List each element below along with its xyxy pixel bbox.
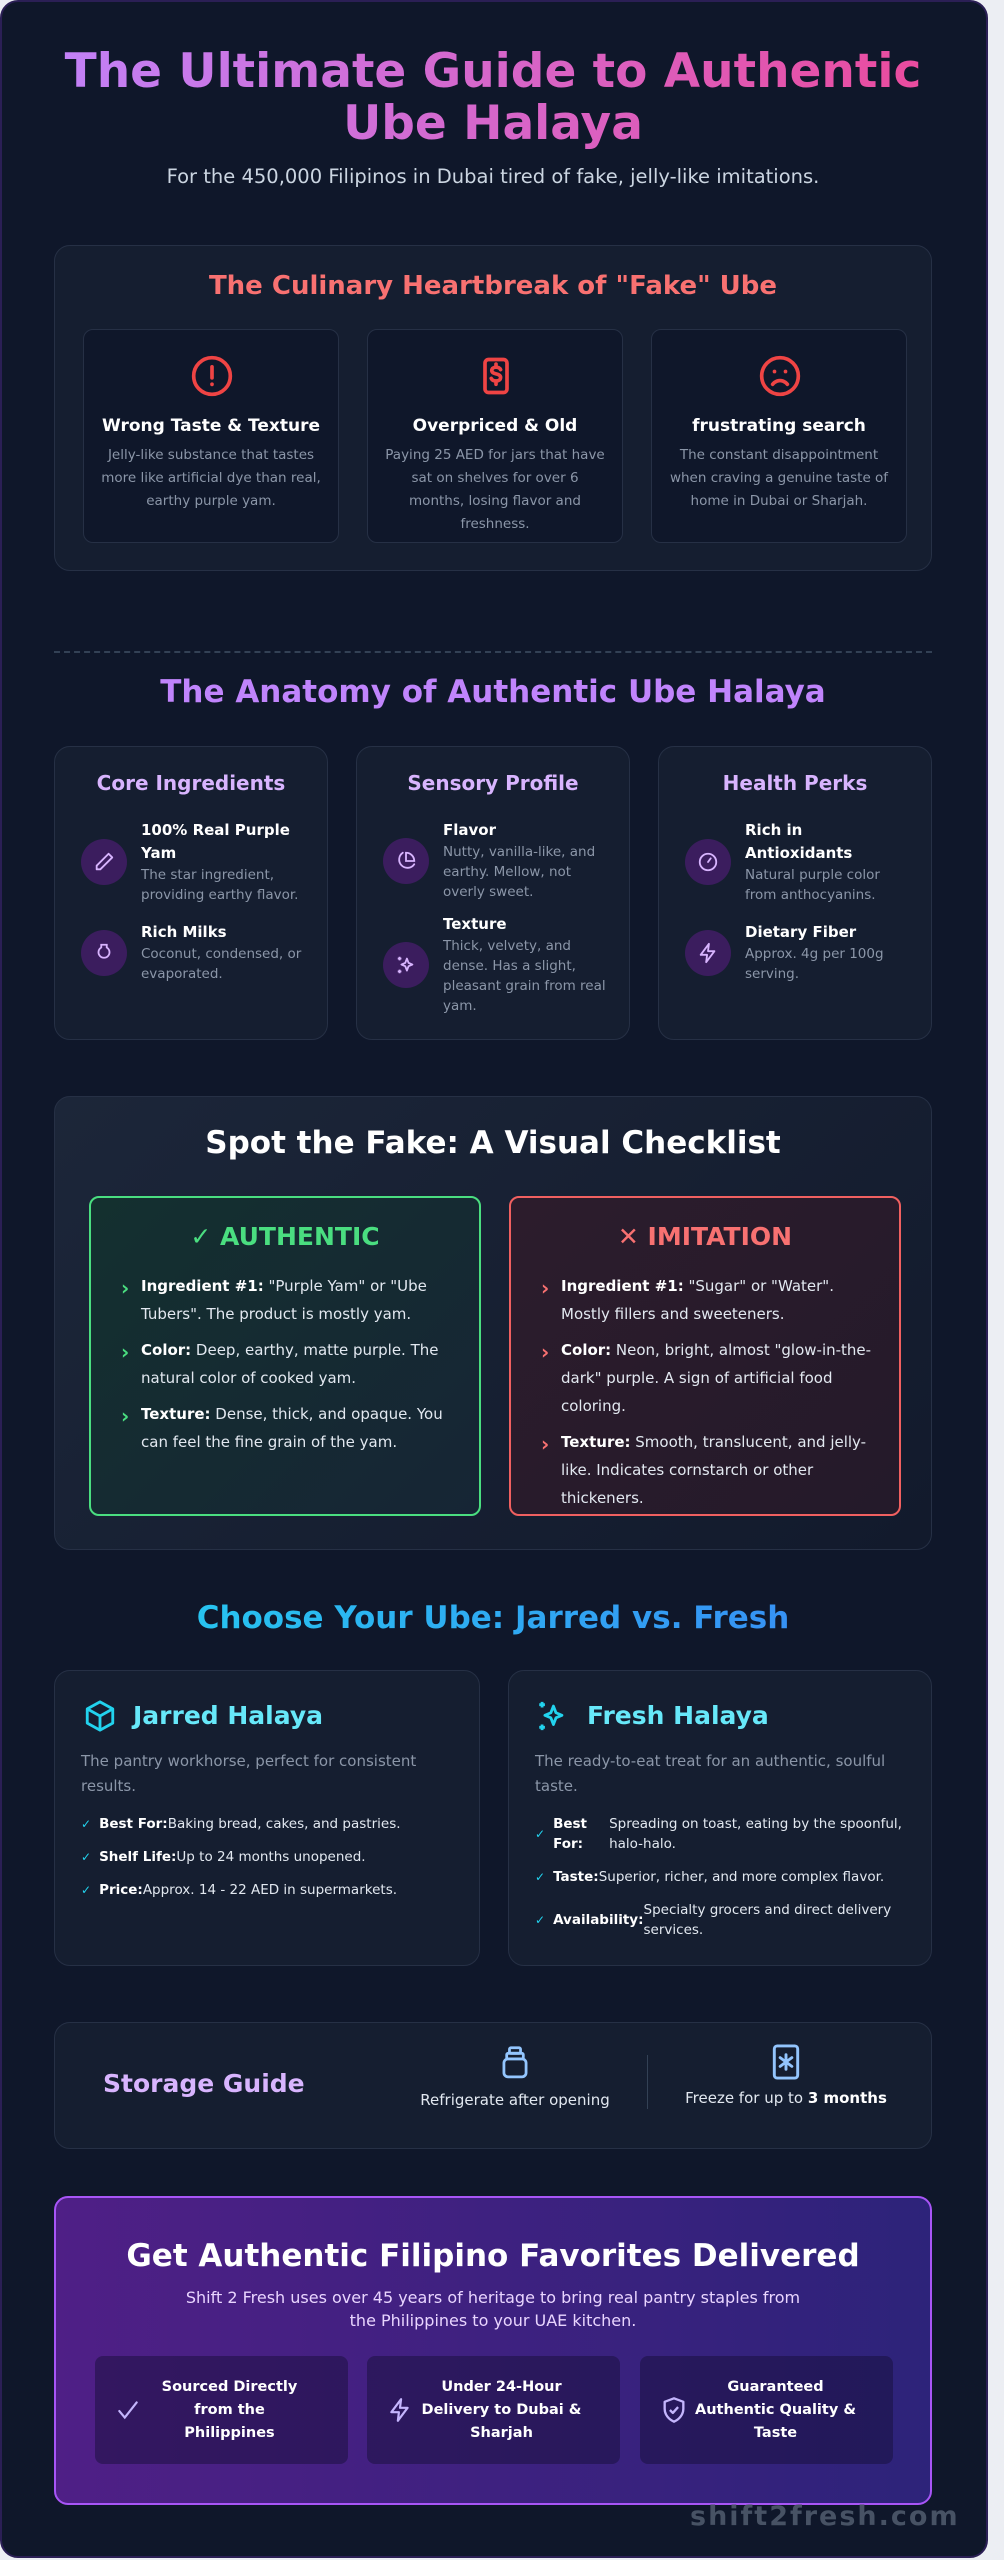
panel: jarred halaya [54, 1670, 480, 1966]
feature: quality [640, 2356, 893, 2464]
item: antioxidants [685, 821, 880, 903]
feature: sourced: Sourced Directly from the Philippines [162, 2378, 297, 2440]
box: authentic [89, 1196, 481, 1516]
icon: sparkles [539, 1702, 564, 1730]
box: authentic: Texture: Dense, thick, and opaque. You can feel the fine grain of the yam. [141, 1405, 443, 1451]
item: flavor [383, 821, 595, 900]
title: Ube Halaya [343, 96, 643, 151]
panel: health perks: Health Perks [723, 771, 867, 795]
panel: health perks [658, 746, 932, 1040]
card: overpriced: Overpriced & Old [413, 416, 577, 436]
card: wrong taste [83, 329, 339, 543]
feature: delivery [367, 2356, 620, 2464]
panel: fresh halaya: ✓ [535, 1827, 545, 1841]
feature: quality: Guaranteed Authentic Quality & Taste [695, 2378, 856, 2440]
icon: sad face [760, 356, 800, 396]
panel: sensory profile [356, 746, 630, 1040]
title: fresh: Fresh Halaya [587, 1701, 769, 1730]
feature: sourced [95, 2356, 348, 2464]
panel: sensory profile: Sensory Profile [407, 771, 579, 795]
heading: anatomy: The Anatomy of Authentic Ube Halaya [160, 674, 826, 710]
panel: fresh halaya [508, 1670, 932, 1966]
item: rich milks: Coconut, condensed, or [141, 946, 301, 962]
item: antioxidants: Natural purple color [745, 867, 880, 883]
heading: cta: Get Authentic Filipino Favorites Delivered [126, 2238, 860, 2274]
panel: jarred halaya: ✓ [81, 1817, 91, 1831]
panel: fresh halaya: Availability: [553, 1912, 644, 1928]
item: purple yam: providing earthy flavor. [141, 887, 298, 903]
card: wrong taste: Jelly-like substance that tastes more like artificial dye than real, earthy purple yam. [101, 447, 321, 509]
item: purple yam: Yam [141, 844, 176, 862]
panel: call to action [54, 2196, 932, 2505]
item: flavor: Nutty, vanilla-like, and earthy. Mellow, not overly sweet. [443, 844, 595, 900]
card: overpriced [367, 329, 623, 543]
item: texture: Thick, velvety, and dense. Has a slight, pleasant grain from real yam. [443, 938, 606, 1014]
panel: fresh halaya: Taste:Superior, richer, and more complex flavor. [553, 1869, 884, 1885]
item: fiber: Approx. 4g per 100g [745, 946, 884, 962]
box: authentic: Ingredient #1: "Purple Yam" or "Ube Tubers". The product is mostly yam. [141, 1277, 427, 1323]
item: rich milks: evaporated. [141, 966, 223, 982]
item: texture: Texture [443, 915, 507, 933]
panel: jarred halaya: Price:Approx. 14 - 22 AED in supermarkets. [99, 1882, 397, 1898]
box: imitation: Texture: Smooth, translucent, and jelly-like. Indicates cornstarch or other thickeners. [561, 1433, 866, 1507]
panel: jarred halaya: Best For:Baking bread, cakes, and pastries. [99, 1816, 401, 1832]
item: rich milks: Rich Milks [141, 923, 227, 941]
panel: core ingredients [54, 746, 328, 1040]
panel: jarred halaya: ✓ [81, 1883, 91, 1897]
panel: fake ube heartbreak [54, 245, 932, 571]
panel: fresh halaya: ✓ [535, 1913, 545, 1927]
heading: storage: Storage Guide [103, 2069, 305, 2098]
card: frustrating search: The constant disappointment when craving a genuine taste of home in Dubai or Sharjah. [670, 447, 888, 509]
heading: choose your ube: Choose Your Ube: Jarred vs. Fresh [197, 1600, 789, 1636]
heading: heartbreak: The Culinary Heartbreak of "Fake" Ube [209, 271, 777, 301]
card: overpriced: months, losing flavor and [409, 493, 581, 509]
panel: call to action: Shift 2 Fresh uses over 45 years of heritage to bring real pantry staples from [186, 2288, 800, 2307]
card: frustrating search [651, 329, 907, 543]
box: authentic: Color: Deep, earthy, matte purple. The natural color of cooked yam. [141, 1341, 438, 1387]
box: imitation [509, 1196, 901, 1516]
icon: alert [192, 356, 232, 396]
box: imitation: Ingredient #1: "Sugar" or "Water". Mostly fillers and sweeteners. [561, 1277, 834, 1323]
panel: fresh halaya: ✓ [535, 1870, 545, 1884]
box: authentic: ✓ AUTHENTIC [190, 1222, 380, 1251]
item: fiber [685, 923, 884, 982]
panel: jarred halaya: Shelf Life:Up to 24 months unopened. [99, 1849, 366, 1865]
panel: fresh halaya: Spreading on toast, eating by the spoonful, halo-halo. [609, 1816, 902, 1852]
item: texture [383, 915, 606, 1014]
panel: jarred halaya: The pantry workhorse, perfect for consistent results. [81, 1752, 416, 1795]
title [10, 46, 976, 150]
item: refrigerate: Refrigerate after opening [420, 2091, 610, 2109]
item: freeze: Freeze for up to 3 months [685, 2089, 887, 2107]
box: imitation: ✕ IMITATION [618, 1222, 792, 1251]
item: purple yam: 100% Real Purple [141, 821, 290, 839]
panel: storage guide [54, 2022, 932, 2149]
card: overpriced: Paying 25 AED for jars that have sat on shelves for over 6 [385, 447, 605, 486]
subtitle: For the 450,000 Filipinos in Dubai tired of fake, jelly-like imitations. [167, 165, 819, 188]
panel: fresh halaya: The ready-to-eat treat for an authentic, soulful taste. [535, 1752, 885, 1795]
heading: spot the fake: Spot the Fake: A Visual Checklist [205, 1125, 781, 1161]
item: fiber: Dietary Fiber [745, 923, 856, 941]
panel: jarred halaya: ✓ [81, 1850, 91, 1864]
panel: fresh halaya: Best For: [553, 1816, 587, 1852]
item: freeze [685, 2044, 887, 2107]
card: frustrating search: frustrating search [692, 416, 866, 436]
item: fiber: serving. [745, 966, 799, 982]
card: overpriced: freshness. [460, 516, 530, 532]
icon: box [86, 1700, 114, 1732]
item: rich milks [81, 923, 302, 982]
card: wrong taste: Wrong Taste & Texture [102, 416, 320, 436]
feature: delivery: Under 24-Hour Delivery to Dubai & Sharjah [422, 2378, 581, 2440]
panel: visual checklist [54, 1096, 932, 1550]
item: purple yam: The star ingredient, [141, 867, 274, 883]
panel: core ingredients: Core Ingredients [97, 771, 285, 795]
item: antioxidants: Antioxidants [745, 844, 852, 862]
title: The Ultimate Guide to Authentic [65, 44, 921, 99]
panel: call to action: the Philippines to your UAE kitchen. [350, 2311, 636, 2330]
footer: website: shift2fresh.com [690, 2501, 960, 2532]
item: refrigerate [420, 2046, 610, 2109]
box: imitation: Color: Neon, bright, almost "glow-in-the-dark" purple. A sign of artificial food coloring. [561, 1341, 871, 1415]
item: purple yam [81, 821, 298, 903]
item: flavor: Flavor [443, 821, 496, 839]
panel: fresh halaya: Specialty grocers and direct delivery services. [644, 1902, 891, 1938]
heading: choose your ube [10, 1600, 976, 1636]
icon: price tag [483, 358, 509, 394]
item: antioxidants: Rich in [745, 821, 802, 839]
item: antioxidants: from anthocyanins. [745, 887, 876, 903]
title: jarred: Jarred Halaya [133, 1701, 323, 1730]
